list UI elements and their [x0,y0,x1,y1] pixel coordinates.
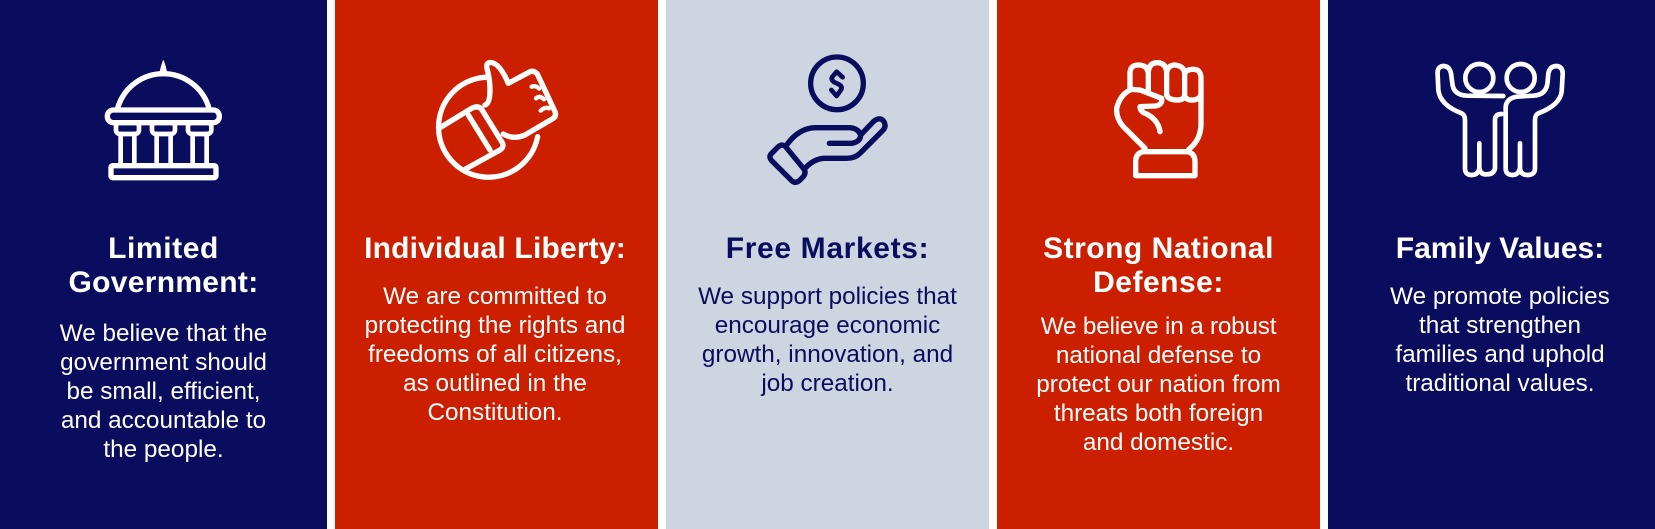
heading: limited government: Limited [108,232,219,265]
text: family values: traditional values. [1405,370,1595,397]
heading: family values: Family Values: [1396,232,1604,265]
text: individual liberty: freedoms of all citizens, [368,341,622,368]
text: free markets: encourage economic [715,312,940,339]
text: free markets: We support policies that [698,283,957,310]
panel: strong national defense [997,0,1320,529]
text: strong national defense: and domestic. [1083,429,1234,456]
text: family values: We promote policies [1390,283,1610,310]
text: strong national defense: We believe in a robust [1041,313,1276,340]
text: strong national defense [1036,313,1281,456]
text: free markets: growth, innovation, and [702,341,953,368]
heading: strong national defense [1043,232,1274,299]
text: limited government: We believe that the [60,320,267,347]
panel: individual liberty [335,0,658,529]
icon: two people with raised arms [1435,62,1566,178]
icon: hand with coin [767,54,888,186]
text: individual liberty: Constitution. [427,399,563,426]
text: free markets: job creation. [761,370,894,397]
icon: capitol dome [104,60,222,180]
text: strong national defense: national defense to [1056,342,1261,369]
icon: thumbs up [436,60,558,180]
text: limited government [60,320,267,463]
heading: limited government [68,232,258,299]
text: individual liberty [365,283,625,426]
heading: free markets: Free Markets: [726,232,929,265]
text: limited government: government should [60,349,267,376]
text: limited government: the people. [103,436,224,463]
text: individual liberty: We are committed to [383,283,607,310]
text: free markets [698,283,957,397]
text: family values: families and uphold [1395,341,1605,368]
heading: strong national defense: Defense: [1093,266,1224,299]
text: strong national defense: protect our nation from [1036,371,1281,398]
panel: limited government [0,0,327,529]
panel: family values [1328,0,1655,529]
panel: free markets [666,0,989,529]
icon: raised fist [1114,60,1204,178]
text: individual liberty: as outlined in the [403,370,587,397]
text: family values: that strengthen [1419,312,1581,339]
text: family values [1390,283,1610,397]
heading: individual liberty: Individual Liberty: [364,232,626,265]
text: strong national defense: threats both foreign [1054,400,1263,427]
text: limited government: be small, efficient, [66,378,261,405]
heading: limited government: Government: [68,266,258,299]
heading: strong national defense: Strong National [1043,232,1274,265]
text: limited government: and accountable to [61,407,266,434]
text: individual liberty: protecting the rights and [365,312,625,339]
